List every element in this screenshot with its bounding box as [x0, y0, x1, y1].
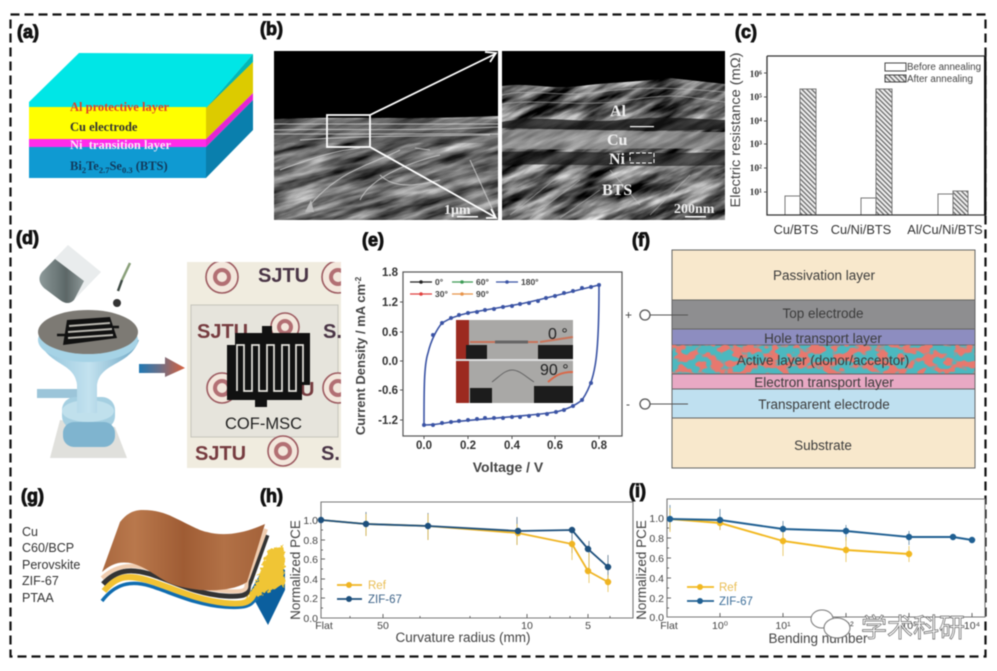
- SEM labels: Ni: [609, 151, 626, 168]
- panel b: SEM cross-sections: [260, 20, 726, 221]
- x tick labels: 10⁴: [964, 620, 980, 632]
- x axis label: Voltage / V: [473, 459, 544, 475]
- SEM image high magnification: [501, 50, 726, 221]
- layer list: Perovskite: [22, 558, 80, 572]
- layer labels: Bi: [70, 159, 82, 173]
- y tick labels: 1.0: [649, 513, 664, 525]
- legend: 0°: [435, 277, 444, 287]
- inset photo: 90 °: [540, 362, 569, 379]
- heading d: (d): [16, 228, 39, 248]
- y tick labels: 1.8: [382, 267, 399, 279]
- layer labels: Passivation layer: [773, 268, 876, 283]
- heading i: (i): [629, 481, 646, 501]
- layer list: ZIF-67: [22, 574, 59, 588]
- legend: Before annealing: [907, 62, 981, 73]
- y tick labels: 0.4: [649, 573, 664, 585]
- panel i: PCE versus bending number: [629, 481, 985, 646]
- SEM labels: [444, 103, 715, 218]
- x tick labels: [660, 620, 980, 632]
- layer labels: 2.7: [99, 165, 110, 175]
- panel d: fabrication illustration and photo: [16, 228, 354, 468]
- layer labels: 2: [82, 165, 86, 175]
- selection box and zoom arrows: [327, 52, 496, 218]
- heading f: (f): [632, 230, 650, 250]
- bent stack: [102, 510, 285, 625]
- filtration funnel: [37, 310, 139, 458]
- layer labels: [70, 100, 171, 175]
- SJTU text: U: [300, 379, 314, 401]
- y tick labels: 0.2: [649, 593, 664, 605]
- x tick labels: 10: [521, 620, 533, 632]
- y tick labels: 0.8: [649, 533, 664, 545]
- layer labels: Cu electrode: [70, 120, 138, 134]
- x tick labels: 0.6: [547, 440, 563, 452]
- x tick labels: [315, 620, 591, 632]
- panel a: layered device stack: [17, 22, 253, 178]
- SEM labels: 1μm: [444, 203, 471, 218]
- ZIF-67 series: [321, 520, 608, 567]
- panel f: device layer diagram: [625, 230, 975, 468]
- COF-MSC label: COF-MSC: [225, 415, 302, 433]
- heading c: (c): [735, 22, 757, 42]
- y tick labels: 0.6: [382, 327, 398, 339]
- layer labels: Al protective layer: [70, 100, 169, 114]
- layer labels: Ni transition layer: [70, 138, 171, 152]
- SEM image low magnification: [273, 50, 499, 221]
- CV loop: [424, 285, 599, 425]
- layer labels: Hole transport layer: [764, 331, 882, 346]
- x tick labels: 0.0: [416, 440, 432, 452]
- y tick labels: 0.8: [303, 535, 318, 547]
- x tick labels: 5: [585, 620, 591, 632]
- x tick labels: 10⁰: [712, 620, 729, 632]
- bars: [785, 89, 968, 215]
- layer list: [22, 525, 80, 605]
- y axis label: Electric resistance (mΩ): [728, 52, 743, 208]
- plot frame: [403, 272, 622, 436]
- x tick labels: [416, 440, 608, 452]
- SJTU text: S.: [323, 321, 342, 343]
- positive terminal: [625, 308, 688, 322]
- Ref series: [670, 519, 909, 554]
- legend: [687, 582, 753, 608]
- layer labels: Se: [109, 159, 122, 173]
- x tick labels: Flat: [315, 620, 333, 632]
- y tick labels: 10⁴: [750, 117, 762, 127]
- ZIF-67 series: [670, 519, 972, 540]
- SJTU text: S.: [321, 443, 340, 465]
- y tick labels: 0.6: [303, 554, 318, 566]
- y axis label: -2: [354, 276, 363, 284]
- x tick labels: 10²: [838, 620, 854, 632]
- legend: 30°: [435, 289, 448, 299]
- negative terminal: [626, 397, 688, 411]
- layers: [672, 250, 975, 468]
- y tick labels: 1.2: [382, 297, 398, 309]
- SEM labels: 200nm: [674, 202, 715, 217]
- watermark text: 学术科研: [861, 608, 965, 645]
- error bars: [670, 505, 909, 562]
- legend: [885, 62, 981, 85]
- layer labels: Transparent electrode: [758, 397, 890, 412]
- legend: 90°: [476, 289, 489, 299]
- legend: [337, 580, 402, 606]
- interdigitated electrode: [227, 326, 310, 407]
- error bars: [366, 512, 608, 592]
- layer labels: Top electrode: [782, 306, 864, 321]
- legend: [410, 277, 539, 299]
- x axis label: Bending number: [768, 631, 868, 646]
- heading b: (b): [260, 19, 283, 39]
- x tick labels: 0.8: [591, 440, 608, 452]
- x tick labels: 0.4: [504, 440, 521, 452]
- heading h: (h): [260, 486, 283, 506]
- SJTU text: SJTU: [197, 321, 248, 343]
- process arrow: [139, 357, 185, 377]
- y tick labels: 10²: [750, 164, 762, 174]
- layer labels: 0.3: [122, 165, 133, 175]
- SEM labels: Al: [610, 103, 627, 120]
- category labels: Cu/Ni/BTS: [831, 222, 891, 237]
- layer list: PTAA: [22, 591, 54, 605]
- y tick labels: 0.6: [649, 553, 664, 565]
- y tick labels: 0.0: [382, 356, 398, 368]
- y tick labels: [303, 515, 318, 625]
- negative terminal: -: [626, 397, 630, 411]
- y tick labels: 0.4: [303, 574, 318, 586]
- Ref series: [321, 520, 608, 582]
- positive terminal: +: [625, 308, 632, 322]
- SJTU text: SJTU: [258, 265, 309, 287]
- photo of COF-MSC: [187, 261, 354, 468]
- panel h: PCE versus curvature radius: [260, 486, 633, 645]
- beaker: [39, 245, 101, 303]
- plot frame: [667, 499, 985, 617]
- printed pattern on disc: [57, 317, 119, 345]
- heading a: (a): [17, 22, 39, 42]
- x axis label: Curvature radius (mm): [395, 630, 531, 645]
- layer labels: Electron transport layer: [754, 375, 894, 390]
- inset photo: [456, 320, 573, 403]
- legend: ZIF-67: [368, 594, 402, 606]
- category labels: Al/Cu/Ni/BTS: [907, 222, 983, 237]
- x tick labels: 10³: [901, 620, 917, 632]
- heading g: (g): [21, 486, 44, 506]
- y tick labels: -1.2: [378, 415, 398, 427]
- seal centres: [215, 270, 345, 458]
- plot frame: [321, 502, 633, 618]
- SJTU text: [195, 265, 342, 465]
- legend: Ref: [368, 580, 387, 592]
- x tick labels: 50: [377, 620, 389, 632]
- panel g: flexible solar cell stack: [21, 486, 285, 625]
- y tick labels: [750, 70, 762, 198]
- y tick labels: [378, 267, 399, 427]
- layered block: [29, 53, 253, 178]
- category labels: [774, 222, 983, 237]
- SEM labels: BTS: [602, 182, 632, 199]
- y tick labels: 10³: [750, 140, 762, 150]
- seals: [206, 261, 354, 466]
- layer list: Cu: [22, 525, 38, 539]
- layer labels: Te: [86, 159, 99, 173]
- panel e: CV curves: [353, 230, 622, 475]
- y axis label: Current Density / mA cm: [353, 284, 368, 435]
- y tick labels: 10⁵: [750, 93, 762, 103]
- x tick labels: 0.2: [460, 440, 476, 452]
- legend: 60°: [476, 277, 489, 287]
- watermark: [811, 608, 965, 645]
- y tick labels: 1.0: [303, 515, 318, 527]
- y tick labels: 10⁶: [750, 70, 762, 80]
- layer labels: Active layer (donor/acceptor): [737, 353, 909, 368]
- y axis label: Normalized PCE: [634, 520, 649, 620]
- y tick labels: 0.0: [303, 613, 318, 625]
- axes: [767, 56, 986, 215]
- layer labels: [737, 268, 909, 453]
- y tick labels: 0.0: [649, 612, 664, 624]
- layer list: C60/BCP: [22, 541, 74, 555]
- x tick labels: Flat: [660, 620, 678, 632]
- legend: Ref: [719, 582, 738, 594]
- panel c: electric resistance bar chart: [728, 22, 986, 237]
- y tick labels: [649, 513, 664, 624]
- legend: 180°: [521, 277, 539, 287]
- layer labels: (BTS): [133, 159, 168, 173]
- layer labels: Substrate: [794, 438, 852, 453]
- SJTU text: SJTU: [195, 443, 246, 465]
- y tick labels: -0.6: [378, 385, 398, 397]
- heading e: (e): [362, 230, 384, 250]
- category labels: Cu/BTS: [774, 222, 818, 237]
- inset photo: 0 °: [548, 326, 568, 343]
- y tick labels: 0.2: [303, 593, 318, 605]
- legend: After annealing: [907, 74, 973, 85]
- y axis label: Normalized PCE: [288, 520, 303, 620]
- x tick labels: 10¹: [775, 620, 791, 632]
- icon: chat bubbles: [811, 610, 850, 638]
- y tick labels: 10¹: [750, 188, 762, 198]
- dropper: [113, 263, 130, 307]
- SEM labels: Cu: [607, 132, 628, 149]
- legend: ZIF-67: [719, 596, 753, 608]
